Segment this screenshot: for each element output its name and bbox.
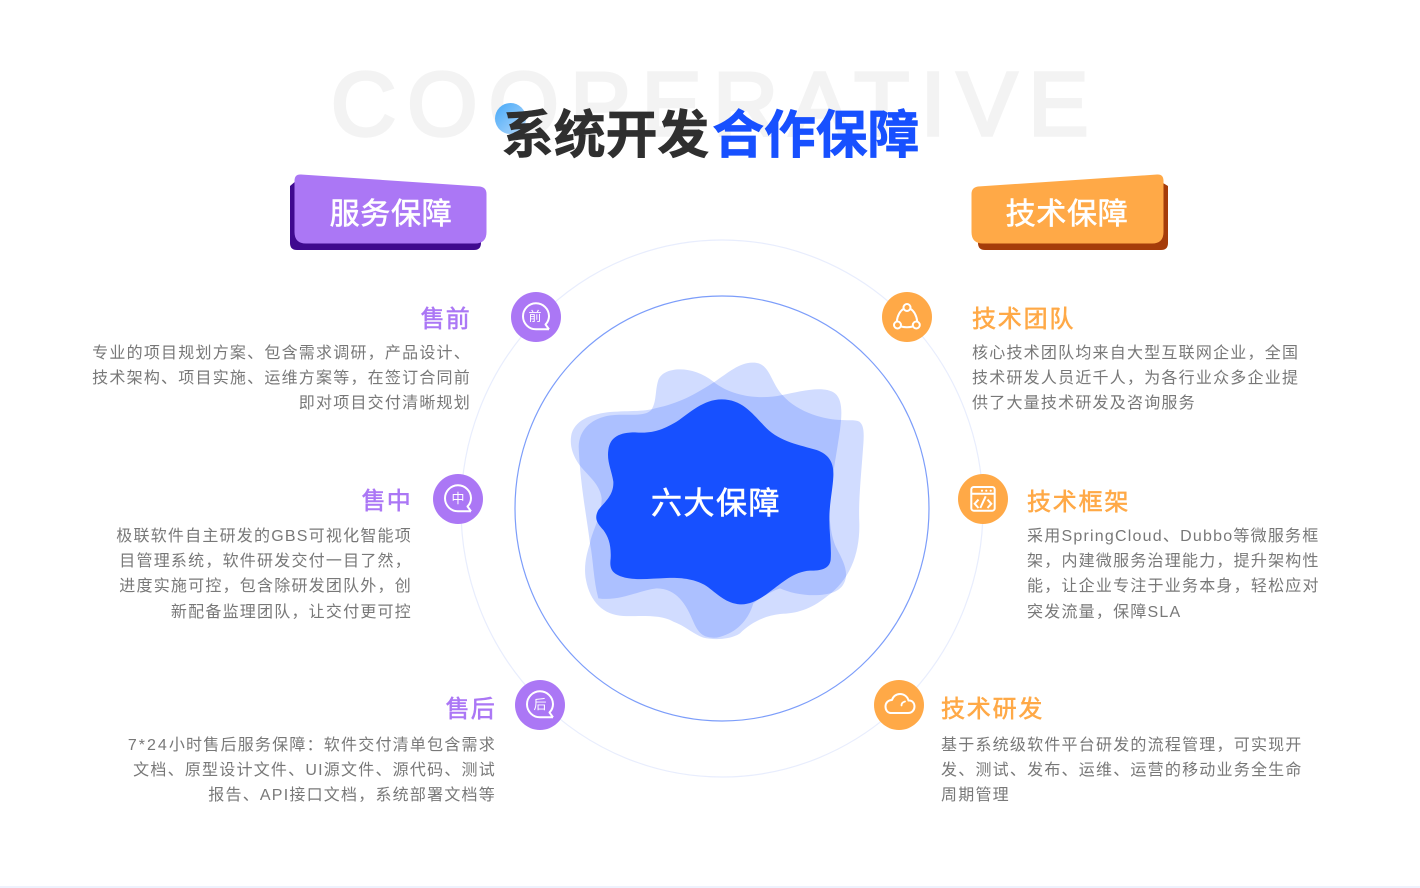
heading: 技术团队: 技术团队 — [972, 306, 1075, 333]
watermark: COOPERATIVE: COOPERATIVE — [331, 55, 1100, 155]
text block: 售前 — [92, 306, 471, 412]
outer ring — [461, 240, 983, 777]
body: 技术团队: 供了大量技术研发及咨询服务 — [972, 395, 1196, 412]
heading: 售前: 售前 — [421, 306, 471, 333]
body: 技术框架 — [1027, 527, 1320, 621]
text block: 售后 — [128, 696, 496, 804]
inner ring — [515, 296, 929, 721]
body: 技术框架: 采用SpringCloud、Dubbo等微服务框 — [1027, 528, 1319, 545]
body: 技术团队 — [972, 344, 1299, 412]
body: 售前: 技术架构、项目实施、运维方案等，在签订合同前 — [92, 370, 471, 387]
body: 技术研发: 基于系统级软件平台研发的流程管理，可实现开 — [941, 737, 1303, 754]
icon: cloud — [874, 680, 924, 730]
body: 技术研发 — [941, 736, 1303, 804]
icon: 后 — [515, 680, 565, 730]
text block: 售中 — [116, 488, 412, 621]
body: 技术框架: 能，让企业专注于业务本身，轻松应对 — [1027, 578, 1320, 595]
blob core — [596, 399, 833, 604]
decorative gradient ball — [495, 103, 526, 134]
icon: 前 — [511, 292, 561, 342]
bottom edge line — [0, 886, 1420, 888]
body: 技术团队: 技术研发人员近千人，为各行业众多企业提 — [972, 370, 1299, 387]
body: 售中: 极联软件自主研发的GBS可视化智能项 — [116, 528, 412, 545]
blob layer 1 — [579, 369, 846, 638]
icon: 前: 前 — [528, 306, 542, 325]
body: 售后: 7*24小时售后服务保障：软件交付清单包含需求 — [128, 737, 496, 754]
body: 技术团队: 核心技术团队均来自大型互联网企业，全国 — [972, 345, 1299, 362]
body: 售后: 文档、原型设计文件、UI源文件、源代码、测试 — [133, 762, 496, 779]
badge: 技术保障: 技术保障 — [1006, 198, 1128, 231]
icon: 后: 后 — [533, 694, 547, 713]
badge: 技术保障 — [972, 174, 1168, 250]
icon: 中 — [433, 474, 483, 524]
body: 售中: 进度实施可控，包含除研发团队外，创 — [119, 578, 412, 595]
badge: 服务保障 — [290, 174, 486, 250]
body: 售前: 即对项目交付清晰规划 — [299, 395, 471, 412]
body: 售前 — [92, 344, 471, 412]
title: 系统开发合作保障 — [502, 106, 919, 164]
body: 技术框架: 架，内建微服务治理能力，提升架构性 — [1027, 553, 1320, 570]
body: 技术研发: 发、测试、发布、运维、运营的移动业务全生命 — [941, 762, 1303, 779]
heading: 技术框架: 技术框架 — [1027, 489, 1130, 516]
heading: 售后: 售后 — [446, 696, 496, 723]
body: 售中 — [116, 527, 412, 621]
blob layer 2 — [571, 363, 864, 639]
blob group — [571, 363, 864, 639]
body: 售中: 新配备监理团队，让交付更可控 — [171, 604, 412, 621]
heading: 售中: 售中 — [362, 488, 412, 515]
icon: code window — [958, 474, 1008, 524]
body: 售后: 报告、API接口文档，系统部署文档等 — [208, 787, 496, 804]
body: 售前: 专业的项目规划方案、包含需求调研，产品设计、 — [92, 345, 471, 362]
text block: 技术研发 — [941, 696, 1303, 804]
body: 售后 — [128, 736, 496, 804]
text block: 技术框架 — [1027, 489, 1320, 621]
heading: 技术研发: 技术研发 — [941, 696, 1044, 723]
body: 售中: 目管理系统，软件研发交付一目了然， — [119, 553, 412, 570]
body: 技术框架: 突发流量，保障SLA — [1027, 604, 1181, 621]
text block: 技术团队 — [972, 306, 1299, 412]
badge: 服务保障: 服务保障 — [330, 198, 452, 231]
body: 技术研发: 周期管理 — [941, 787, 1010, 804]
icon: team — [882, 292, 932, 342]
central label: 六大保障: 六大保障 — [651, 486, 781, 521]
icon: 中: 中 — [451, 488, 465, 507]
